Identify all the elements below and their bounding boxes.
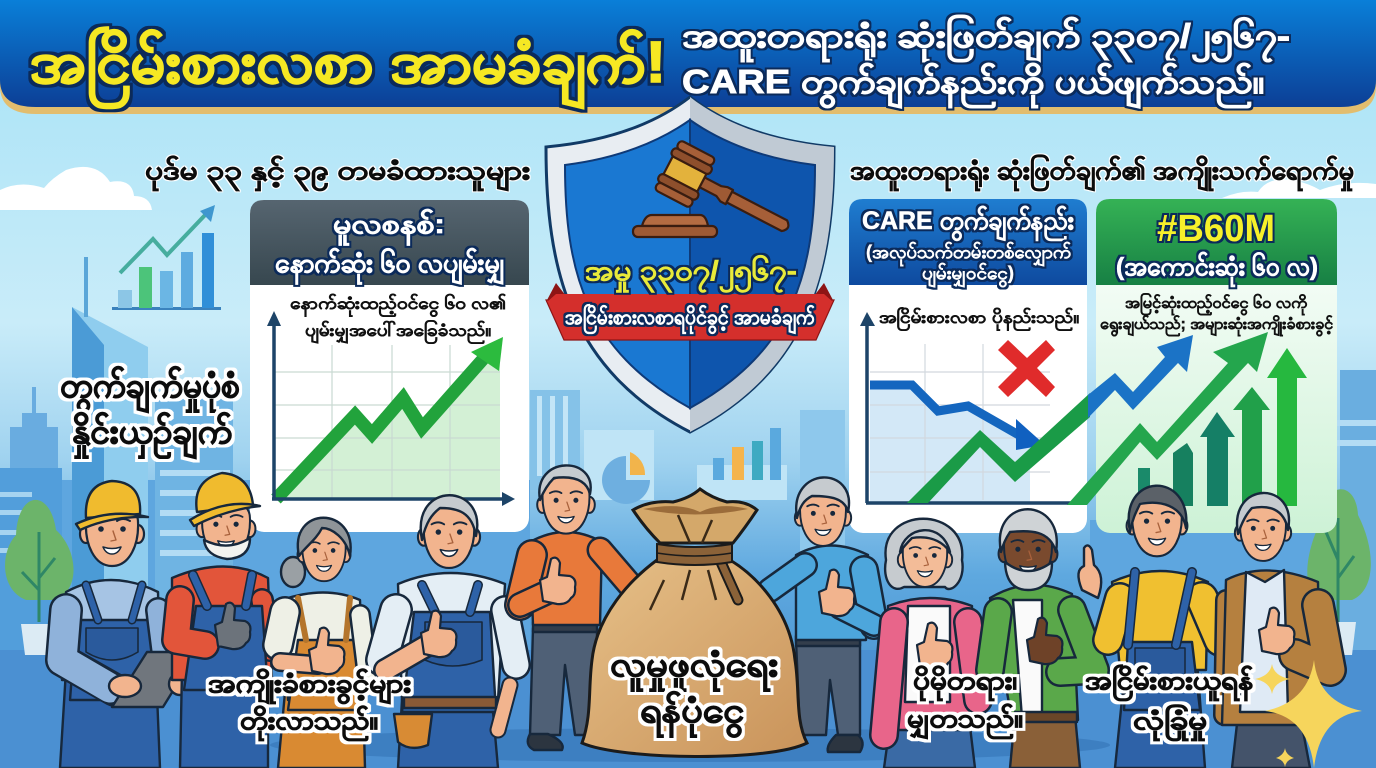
- fund label: ရန်ပုံငွေ: [640, 691, 744, 738]
- arrow: long green growth arrow: [907, 393, 1090, 503]
- clouds: [0, 167, 1376, 210]
- panel heading: [275, 209, 505, 285]
- heading: left section: ပုဒ်မ ၃၃ နှင့် ၃၉ တမခံထားသူများ: [145, 155, 530, 192]
- heading: right section: အထူးတရားရုံး ဆုံးဖြတ်ချက်၏ အကျိုးသက်ရောက်မှု: [850, 153, 1354, 192]
- header banner: [0, 0, 1376, 114]
- shield emblem: [546, 97, 834, 432]
- caption: retirement security: အငြိမ်းစားယူရန်: [1085, 663, 1253, 702]
- figure: man in orange shirt: [520, 465, 630, 750]
- panel heading: CARE တွက်ချက်နည်း: [862, 206, 1074, 241]
- header subtitle: [682, 15, 1290, 109]
- icon: gavel: [633, 139, 801, 252]
- panel: original system: [250, 200, 529, 532]
- panel description: ရွေးချယ်သည်; အများဆုံးအကျိုးခံစားခွင့်: [1100, 314, 1333, 337]
- tree right: [1307, 489, 1371, 655]
- figure: woman in pink cardigan: [884, 519, 978, 768]
- figure: man in brown jacket: [1222, 493, 1330, 768]
- panel heading: [1116, 208, 1318, 287]
- figure: woman with orange apron: [278, 518, 368, 768]
- panel heading: #B60M: [1157, 208, 1275, 250]
- figure: worker with hard hat and tablet: [60, 481, 197, 768]
- panel heading: ပျမ်းမျှဝင်ငွေ): [922, 262, 1014, 288]
- side label: calculation comparison: နှိုင်းယှဉ်ချက်: [72, 412, 232, 459]
- figure: worker in yellow shirt: [1078, 486, 1220, 768]
- panel description: ပျမ်းမျှအပေါ်အခြေခံသည်။: [305, 318, 491, 345]
- title: အငြိမ်းစားလစာ အာမခံချက်!: [30, 26, 666, 109]
- caption: benefits increase: အကျိုးခံစားခွင့်များ: [208, 668, 411, 705]
- caption: retirement security: လုံခြုံမှု: [1133, 703, 1207, 742]
- panel heading: မူလစနစ်:: [333, 209, 445, 246]
- caption: fairer: မျှတသည်။: [907, 703, 1023, 740]
- skyline buildings: [0, 257, 1376, 768]
- panel heading: [862, 206, 1074, 288]
- panel description: [1100, 292, 1333, 337]
- fund label: [610, 646, 778, 738]
- arrow: second green growth arrow: [1067, 332, 1268, 505]
- figure: man in green shirt: [990, 509, 1095, 768]
- bar arrows: [1138, 348, 1307, 506]
- panel description: [290, 292, 506, 345]
- figure: man in blue shirt: [770, 477, 874, 752]
- panel: CARE method: [849, 199, 1087, 533]
- side label: calculation comparison: တွက်ချက်မှုပုံစံ: [60, 366, 240, 413]
- panel: B60M method: [1096, 199, 1337, 533]
- tree left: [5, 500, 74, 655]
- side label: calculation comparison: [60, 366, 240, 459]
- ribbon banner: အငြိမ်းစားလစာရပိုင်ခွင့် အာမခံချက်: [565, 302, 815, 335]
- caption: benefits increase: တိုးလာသည်။: [240, 705, 378, 742]
- caption: benefits increase: [208, 668, 411, 742]
- ribbon banner: [546, 283, 834, 340]
- arrow: blue growth arrow: [1088, 335, 1193, 418]
- line chart: rising average: [267, 311, 515, 506]
- header subtitle: CARE တွက်ချက်နည်းကို ပယ်ဖျက်သည်။: [682, 62, 1264, 109]
- panel heading: (အလုပ်သက်တမ်းတစ်လျှောက်: [866, 241, 1071, 267]
- fund label: လူမှုဖူလုံရေး: [610, 646, 778, 692]
- figure: worker with white shirt: [382, 495, 516, 768]
- money bag: social security fund: [582, 489, 807, 757]
- panel description: အငြိမ်းစားလစာ ပိုနည်းသည်။: [879, 306, 1079, 332]
- caption: retirement security: [1085, 663, 1253, 742]
- panel heading: (အကောင်းဆုံး ၆၀ လ): [1116, 252, 1318, 287]
- case number: အမှု ၃၃၀၇/၂၅၆၇-: [585, 253, 797, 294]
- figure: worker with red shirt: [172, 473, 272, 768]
- icon: sparkles: [1255, 660, 1362, 768]
- panel description: နောက်ဆုံးထည့်ဝင်ငွေ ၆၀ လ၏: [290, 292, 506, 318]
- caption: fairer: [907, 665, 1023, 740]
- caption: fairer: ပိုမိုတရား၊: [913, 665, 1017, 702]
- icon: red cross: [998, 340, 1055, 397]
- line chart: falling average: [860, 312, 1087, 503]
- header subtitle: အထူးတရားရုံး ဆုံးဖြတ်ချက် ၃၃၀၇/၂၅၆၇-: [682, 15, 1290, 63]
- panel description: အမြင့်ဆုံးထည့်ဝင်ငွေ ၆၀ လကို: [1125, 292, 1308, 316]
- panel heading: နောက်ဆုံး ၆၀ လပျမ်းမျှ: [275, 247, 505, 285]
- icon: small growth chart: [112, 205, 221, 310]
